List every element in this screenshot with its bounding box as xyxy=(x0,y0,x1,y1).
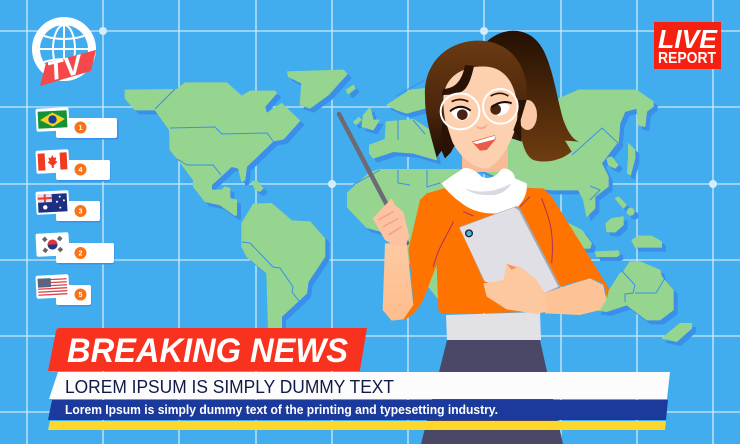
live report badge xyxy=(654,22,721,69)
orange blouse xyxy=(402,187,609,320)
fringe xyxy=(442,65,474,95)
raised arm and hand xyxy=(373,198,413,321)
entry 4: South Korea: 2 xyxy=(79,250,83,258)
pointer stick xyxy=(339,114,407,243)
blouse waist xyxy=(446,312,541,340)
red headline bar xyxy=(48,328,367,371)
entry 5: United States: 5 xyxy=(79,292,83,299)
entry 2: Canada: 4 xyxy=(79,167,83,174)
world map xyxy=(125,70,696,346)
country list xyxy=(35,107,119,306)
logo ribbon xyxy=(40,50,96,86)
entry 3: Australia xyxy=(35,190,101,222)
entry 1: Brazil xyxy=(35,107,119,140)
news anchor woman xyxy=(339,31,609,444)
blue ticker bar xyxy=(48,400,668,420)
grid nodes xyxy=(99,27,717,188)
holding arm and hand xyxy=(483,264,606,315)
breaking news banner xyxy=(48,328,670,430)
entry 4: South Korea xyxy=(35,232,115,264)
report label: REPORT xyxy=(658,50,716,67)
entry 5: United States xyxy=(35,274,92,306)
logo globe xyxy=(32,17,96,81)
ticker title: LOREM IPSUM IS SIMPLY DUMMY TEXT xyxy=(65,376,394,397)
headline: BREAKING NEWS xyxy=(67,332,348,370)
glasses xyxy=(441,89,518,129)
eyes xyxy=(450,93,512,121)
mouth xyxy=(472,135,496,151)
nose xyxy=(475,124,487,129)
live label: LIVE xyxy=(658,24,718,54)
tablet xyxy=(459,206,561,295)
ticker subtitle: Lorem Ipsum is simply dummy text of the printing and typesetting industry. xyxy=(65,403,498,417)
entry 1: Brazil: 1 xyxy=(79,125,83,132)
face xyxy=(438,65,537,169)
TV logo xyxy=(32,17,96,87)
scarf xyxy=(442,168,527,214)
tablet camera xyxy=(466,230,472,237)
ponytail and back hair xyxy=(425,31,579,162)
skirt xyxy=(421,340,563,444)
neck xyxy=(462,148,508,172)
white ticker bar xyxy=(49,372,670,399)
ear xyxy=(518,100,537,130)
yellow strip xyxy=(48,421,666,430)
entry 3: Australia: 3 xyxy=(79,208,83,216)
logo label: TV xyxy=(44,49,87,87)
entry 2: Canada xyxy=(35,149,111,182)
